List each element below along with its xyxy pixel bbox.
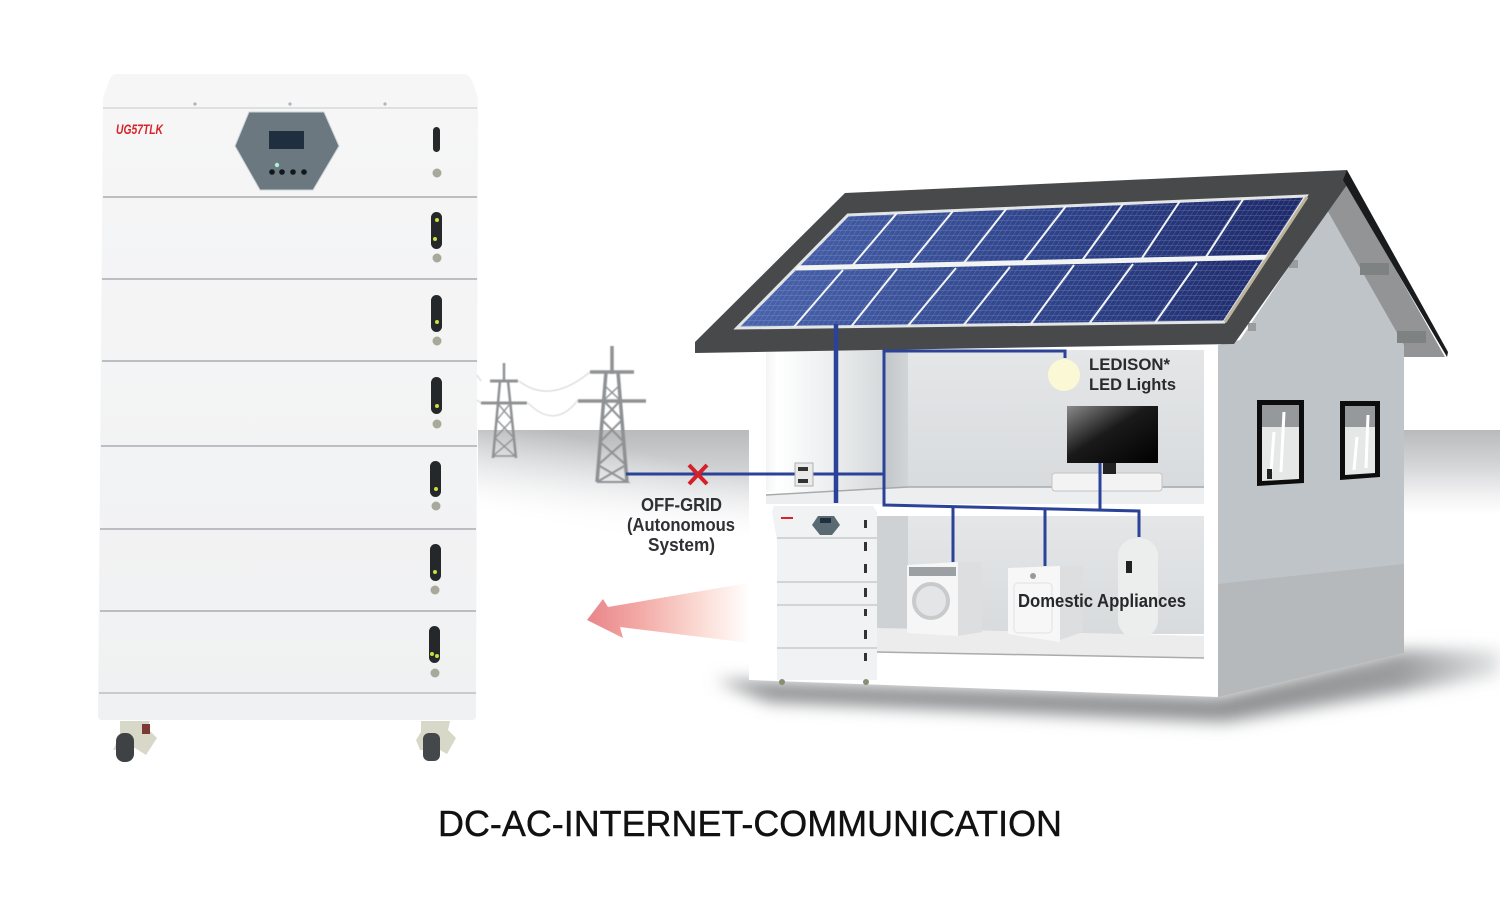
power lines [477,372,590,416]
dryer [1008,566,1083,642]
lower side band [1218,564,1404,697]
front wall [749,345,1218,697]
soffit brackets [1248,260,1426,343]
red logo: UG57TLK [116,121,164,137]
ceiling light [1048,359,1080,391]
module seams [99,108,477,693]
LED label: LED Lights [1089,375,1176,394]
top screws [193,102,387,106]
roof [695,170,1349,353]
red cross [689,465,707,484]
inverter hexagon panel [235,112,339,190]
cabinet body [98,74,478,720]
house [695,170,1448,697]
upper room [766,350,1204,504]
ground backdrop [478,430,1500,540]
off-grid label: OFF-GRID [641,495,722,515]
solar array [737,196,1307,328]
left caster [113,721,157,762]
panel rails [793,198,1272,328]
washing machine [907,562,982,636]
house shadow [715,650,1500,722]
small battery in house [772,506,877,685]
right caster [416,721,456,761]
appliances label: Domestic Appliances [1018,591,1186,611]
large tower [578,346,646,482]
buttons [269,169,307,175]
off-grid label: (Autonomous [627,515,735,535]
display [269,131,304,149]
right window [1340,401,1380,480]
water heater tank [1118,538,1158,638]
left window [1257,400,1304,486]
module indicators [429,127,442,678]
status LED [275,163,279,167]
title: DC-AC-INTERNET-COMMUNICATION [438,803,1062,844]
side wall [1218,210,1404,697]
battery tower [98,74,478,762]
small tower [481,363,527,458]
off-grid label: System) [648,535,715,555]
gable edge [1343,170,1448,357]
gable soffit [1327,180,1445,357]
television [1052,406,1162,491]
wiring [626,324,1139,566]
lower room [877,516,1204,658]
meter box [795,463,813,486]
transmission towers and lines [477,346,646,482]
LED label: LEDISON* [1089,355,1170,374]
heat arrow [587,583,750,643]
